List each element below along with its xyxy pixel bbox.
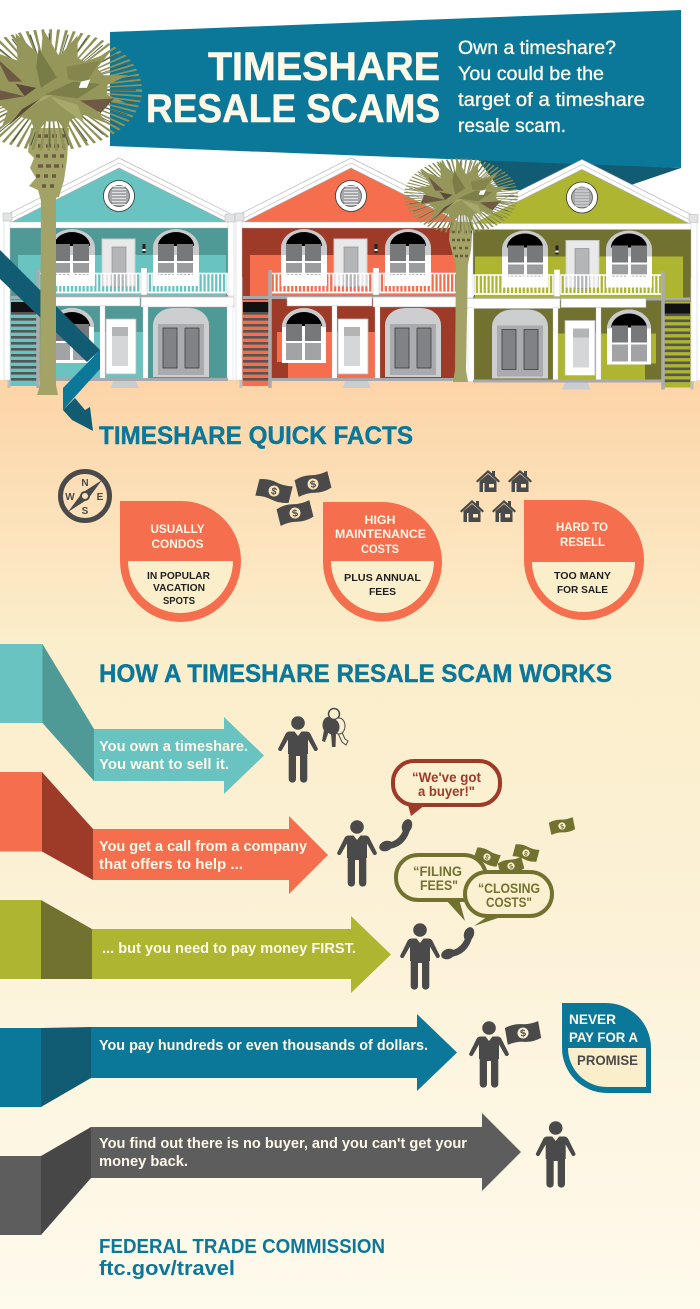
- icon: keys: [322, 708, 348, 747]
- step 5 ribbon arrow: [0, 1113, 521, 1235]
- fronds: [0, 29, 128, 134]
- fact card: hard to resell: RESELL: [560, 537, 605, 549]
- step 3 ribbon arrow: ... but you need to pay money FIRST.: [102, 941, 356, 957]
- speech bubble: buyer: “We've got: [412, 770, 481, 785]
- icon: money bill: [505, 1020, 541, 1046]
- icon: compass: S: [82, 506, 89, 517]
- callout: never pay for a promise: NEVER: [569, 1011, 616, 1027]
- palm tree: small: [414, 158, 509, 382]
- heading: quick facts: TIMESHARE QUICK FACTS: [99, 422, 413, 450]
- speech bubble: buyer: [393, 761, 500, 816]
- fact card: high maintenance costs: HIGH: [364, 515, 396, 527]
- banner fold: [477, 158, 681, 190]
- speech bubble: closing costs: COSTS": [486, 895, 532, 910]
- money bills: olive: $: [560, 823, 565, 831]
- step 4 ribbon arrow: [0, 1014, 457, 1107]
- fact card: high maintenance costs: MAINTENANCE: [335, 529, 426, 541]
- icon: houses: [460, 470, 532, 522]
- fact card: usually condos: [120, 501, 241, 622]
- money bills: olive: $: [523, 850, 529, 858]
- trunk boot: [28, 128, 69, 201]
- icon: money bills: $: [309, 479, 318, 491]
- speech bubble: buyer: a buyer!": [418, 784, 475, 799]
- house: teal: [3, 158, 235, 388]
- step 1 ribbon arrow: [0, 644, 264, 794]
- banner ribbon: [110, 10, 681, 168]
- person 1: [278, 716, 318, 783]
- step 5 ribbon arrow: You find out there is no buyer, and you can't get your: [99, 1136, 467, 1152]
- step 2 ribbon arrow: [0, 772, 328, 894]
- trunk: [37, 195, 58, 395]
- banner subtitle: You could be the: [458, 64, 604, 85]
- fact card: usually condos: IN POPULAR: [147, 570, 210, 582]
- icon: compass: W: [65, 492, 75, 503]
- fact card: high maintenance costs: FEES: [369, 586, 396, 598]
- icon: money bill: $: [519, 1028, 527, 1040]
- fact card: high maintenance costs: [323, 502, 442, 622]
- ribbon arrow from banner to quick facts: [0, 250, 100, 431]
- speech bubble: filing fees: “FILING: [413, 864, 462, 879]
- step 4 ribbon arrow: You pay hundreds or even thousands of dollars.: [99, 1038, 428, 1054]
- house: coral: [235, 158, 467, 388]
- fact card: hard to resell: TOO MANY: [554, 570, 611, 582]
- fact card: usually condos: VACATION: [153, 582, 205, 594]
- fact card: hard to resell: [524, 500, 644, 620]
- icon: money bills: $: [270, 486, 278, 498]
- icon: money bills: $: [291, 508, 300, 520]
- money bills: olive: [473, 817, 575, 876]
- person 4: [469, 1021, 509, 1088]
- palm tree: large: [0, 29, 128, 395]
- icon: money bills: [255, 470, 332, 527]
- fact card: hard to resell: HARD TO: [556, 522, 608, 534]
- title text: TIMESHARE: [208, 45, 440, 89]
- title text: RESALE SCAMS: [146, 87, 440, 131]
- banner subtitle: [458, 38, 645, 137]
- icon: phone: [440, 926, 476, 961]
- fact card: high maintenance costs: COSTS: [361, 544, 399, 556]
- fact card: usually condos: USUALLY: [150, 524, 205, 536]
- banner subtitle: resale scam.: [458, 116, 566, 137]
- house: olive: [466, 160, 698, 390]
- person 2: [337, 820, 377, 887]
- footer: agency and link: [99, 1236, 385, 1280]
- title banner: [110, 10, 681, 190]
- fact card: high maintenance costs: PLUS ANNUAL: [344, 572, 422, 584]
- icon: phone: [378, 818, 414, 853]
- icon: compass: [60, 472, 110, 520]
- speech bubble: filing fees: FEES": [420, 878, 458, 893]
- step 1 ribbon arrow: You own a timeshare.: [99, 739, 248, 755]
- callout: never pay for a promise: PROMISE: [577, 1052, 638, 1068]
- step 2 ribbon arrow: You get a call from a company: [99, 839, 307, 855]
- speech bubble: closing costs: [465, 872, 552, 926]
- icon: compass: E: [97, 492, 104, 503]
- fact card: usually condos: CONDOS: [152, 539, 204, 551]
- callout: never pay for a promise: PAY FOR A: [569, 1029, 638, 1045]
- speech bubble: closing costs: “CLOSING: [478, 881, 540, 896]
- fact card: usually condos: SPOTS: [163, 595, 195, 607]
- banner subtitle: target of a timeshare: [458, 90, 645, 111]
- step 5 ribbon arrow: money back.: [99, 1154, 188, 1170]
- banner subtitle: Own a timeshare?: [458, 38, 616, 59]
- trunk: [453, 260, 468, 382]
- fact card: hard to resell: FOR SALE: [557, 584, 608, 596]
- title text: [146, 45, 440, 131]
- money bills: olive: $: [484, 854, 490, 862]
- step 3 ribbon arrow: [0, 900, 391, 993]
- person 3: [400, 923, 440, 990]
- footer: agency and link: ftc.gov/travel: [99, 1258, 235, 1280]
- callout: never pay for a promise: [562, 1003, 651, 1093]
- trunk boot: [449, 222, 473, 265]
- step 2 ribbon arrow: that offers to help ...: [99, 857, 243, 873]
- speech bubble: filing fees: [396, 855, 486, 921]
- step 1 ribbon arrow: You want to sell it.: [99, 757, 229, 773]
- icon: compass: N: [81, 478, 89, 489]
- person 5: [536, 1121, 575, 1188]
- fronds: [414, 158, 509, 223]
- footer: agency and link: FEDERAL TRADE COMMISSION: [99, 1236, 385, 1258]
- money bills: olive: $: [509, 863, 514, 871]
- background sand gradient: [0, 380, 700, 1309]
- heading: how a scam works: HOW A TIMESHARE RESALE SCAM WORKS: [99, 660, 612, 688]
